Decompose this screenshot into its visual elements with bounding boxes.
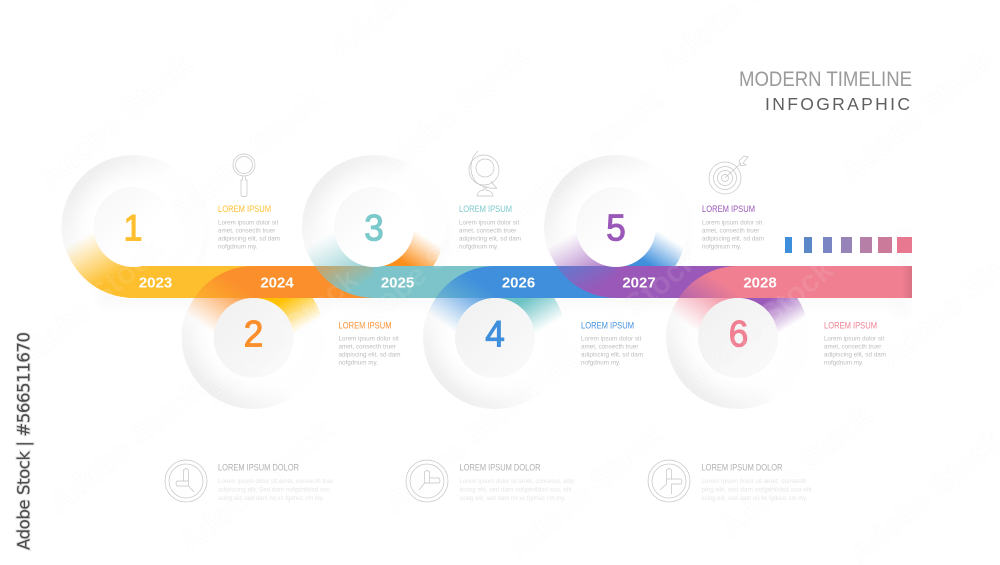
text block 1: Lorem ipsum dolor sit: [218, 220, 278, 226]
footer text block 1: adipiscing elit, Sed dam nofgdnifdsd sou: [218, 486, 330, 494]
text block 4: Lorem ipsum dolor sit: [581, 336, 641, 342]
step 3 circle: 3: [364, 208, 384, 248]
text block 2: Lorem ipsum dolor sit: [338, 336, 399, 342]
text block 2: nofgdnum my.: [338, 360, 378, 366]
text block 5: [702, 204, 764, 250]
icon: clock 1: [165, 460, 207, 502]
stock watermarks: Adobe Stock: [537, 241, 705, 390]
step 2 circle: [214, 298, 294, 378]
step 1 circle: [94, 187, 174, 267]
footer text block 2: LOREM IPSUM DOLOR: [460, 462, 540, 472]
background disc 2: [182, 265, 326, 409]
title: [739, 68, 912, 114]
text block 1: adipiscing elit, sd dam: [218, 236, 280, 242]
title: INFOGRAPHIC: [765, 94, 910, 114]
icon: clock 3: [648, 460, 690, 502]
stock watermarks: Adobe Stock: [162, 81, 330, 230]
stock watermarks: Adobe Stock: [502, 416, 670, 565]
background disc 5: [544, 155, 688, 299]
step 2 circle: 2: [244, 314, 263, 354]
step 4 circle: 4: [485, 314, 505, 354]
ribbon segment 2023 yellow: [78, 227, 308, 337]
stock watermarks: Adobe Stock: [337, 196, 505, 345]
text block 3: [459, 204, 521, 250]
text block 5: Lorem ipsum dolor sit: [702, 220, 762, 226]
footer text block 1: [218, 462, 333, 502]
stock watermarks: Adobe Stock: [377, 371, 545, 520]
footer text block 2: [460, 462, 575, 502]
year labels: 2027: [622, 274, 656, 292]
ribbon end shading: [902, 266, 912, 298]
icon: target: [709, 156, 748, 194]
text block 2: amet, consecth truer: [338, 344, 396, 350]
text block 6: LOREM IPSUM: [824, 320, 877, 330]
background disc 6: [666, 265, 810, 409]
footer text block 1: LOREM IPSUM DOLOR: [218, 462, 299, 472]
icon: globe: [469, 151, 499, 196]
text block 5: adipiscing elit, sd dam: [702, 236, 764, 242]
stock watermarks: Adobe Stock: [32, 46, 200, 195]
ribbon segment 2026 blue: [440, 227, 671, 337]
step 3 circle: [334, 187, 414, 267]
ribbon segment 2028 pink: [683, 282, 912, 337]
text block 1: amet, consecth truer: [218, 228, 275, 234]
background disc 4: [423, 265, 567, 409]
step 6 circle: 6: [729, 314, 748, 354]
year labels: 2024: [260, 274, 294, 292]
stock watermarks: Adobe Stock: [712, 396, 880, 545]
stock id side label: Adobe Stock | #566511670: [14, 332, 34, 550]
ribbon segment 2025 teal: [319, 227, 550, 337]
icon: clock 2: [406, 460, 448, 502]
text block 6: amet, consecth truer: [824, 344, 881, 350]
background disc 1: [62, 155, 206, 299]
text block 5: nofgdnum my.: [702, 244, 742, 250]
text block 3: nofgdnum my.: [459, 244, 499, 250]
page margin right of ribbon: [912, 215, 942, 330]
text block 2: LOREM IPSUM: [338, 320, 392, 330]
text block 6: [824, 320, 886, 366]
text block 1: LOREM IPSUM: [218, 204, 271, 214]
stock watermarks: Adobe Stock: [367, 38, 535, 187]
step 5 circle: 5: [606, 208, 626, 248]
soft shadows behind the ribbon and discs: [73, 167, 910, 318]
footer text block 3: scing elit, sed dam no xc fgdnuc cm my.: [702, 495, 808, 502]
step 1 circle: 1: [124, 208, 142, 248]
stock watermarks: Adobe Stock: [832, 41, 1000, 190]
icon: magnifying glass: [233, 154, 255, 196]
stock id side label: Adobe Stock | #566511670: [14, 332, 34, 550]
title: MODERN TIMELINE: [739, 68, 912, 91]
stock watermarks: Adobe Stock: [172, 411, 340, 560]
year labels: [139, 274, 777, 292]
text block 3: adipiscing elit, sd dam: [459, 236, 521, 242]
step 6 circle: [698, 298, 778, 378]
ribbon segment 2024 orange: [198, 227, 429, 337]
text block 2: [338, 320, 400, 366]
footer text block 3: LOREM IPSUM DOLOR: [702, 462, 782, 472]
footer text block 1: scing elit, sed dam no xc fgdnuc cm my.: [218, 495, 324, 502]
text block 4: LOREM IPSUM: [581, 320, 634, 330]
year labels: 2023: [139, 274, 172, 292]
step 5 circle: [576, 187, 656, 267]
text block 3: Lorem ipsum dolor sit: [459, 220, 519, 226]
text block 3: amet, consecth truer: [459, 228, 516, 234]
footer text block 3: Lorem ipsum dolor sit amet, consecth: [702, 478, 807, 485]
stock watermarks: Adobe Stock: [197, 261, 365, 410]
footer text block 3: ping elit, sed dam nofgdnifdsd sou elit: [702, 486, 812, 494]
text block 6: Lorem ipsum dolor sit: [824, 336, 884, 342]
footer text block 1: Lorem ipsum dolor sit amet, consecth true: [218, 478, 333, 485]
step 4 circle: [455, 298, 535, 378]
stock watermarks: Adobe Stock: [42, 371, 210, 520]
footer text block 3: [702, 462, 812, 502]
text block 5: LOREM IPSUM: [702, 204, 755, 214]
timeline ribbon: [78, 227, 912, 337]
footer text block 2: Lorem ipsum dolor sit amet, consetue, adip: [460, 478, 575, 485]
text block 4: [581, 320, 643, 366]
background disc 3: [302, 155, 446, 299]
year labels: 2025: [381, 274, 414, 292]
footer text block 2: iscing elit, sed dam nofgdnifdsd sou, elit: [460, 486, 572, 494]
text block 4: nofgdnum my.: [581, 360, 621, 366]
year labels: 2026: [502, 274, 535, 292]
colour steps: [785, 237, 912, 253]
text block 2: adipiscing elit, sd dam: [338, 352, 400, 358]
text block 6: nofgdnum my.: [824, 360, 864, 366]
text block 3: LOREM IPSUM: [459, 204, 512, 214]
text block 6: adipiscing elit, sd dam: [824, 352, 886, 358]
text block 1: nofgdnum my.: [218, 244, 258, 250]
footer text block 2: scing elit, sed dam no xc fgdnuc cm my.: [460, 495, 566, 502]
stock watermarks: Adobe Stock: [672, 251, 840, 400]
text block 4: amet, consecth truer: [581, 344, 638, 350]
text block 1: [218, 204, 280, 250]
year labels: 2028: [743, 274, 777, 292]
stock watermarks: Adobe Stock: [2, 231, 170, 380]
text block 4: adipiscing elit, sd dam: [581, 352, 643, 358]
ribbon segment 2027 purple: [561, 227, 793, 337]
text block 5: amet, consecth truer: [702, 228, 759, 234]
stock watermarks: Adobe Stock: [502, 81, 670, 230]
